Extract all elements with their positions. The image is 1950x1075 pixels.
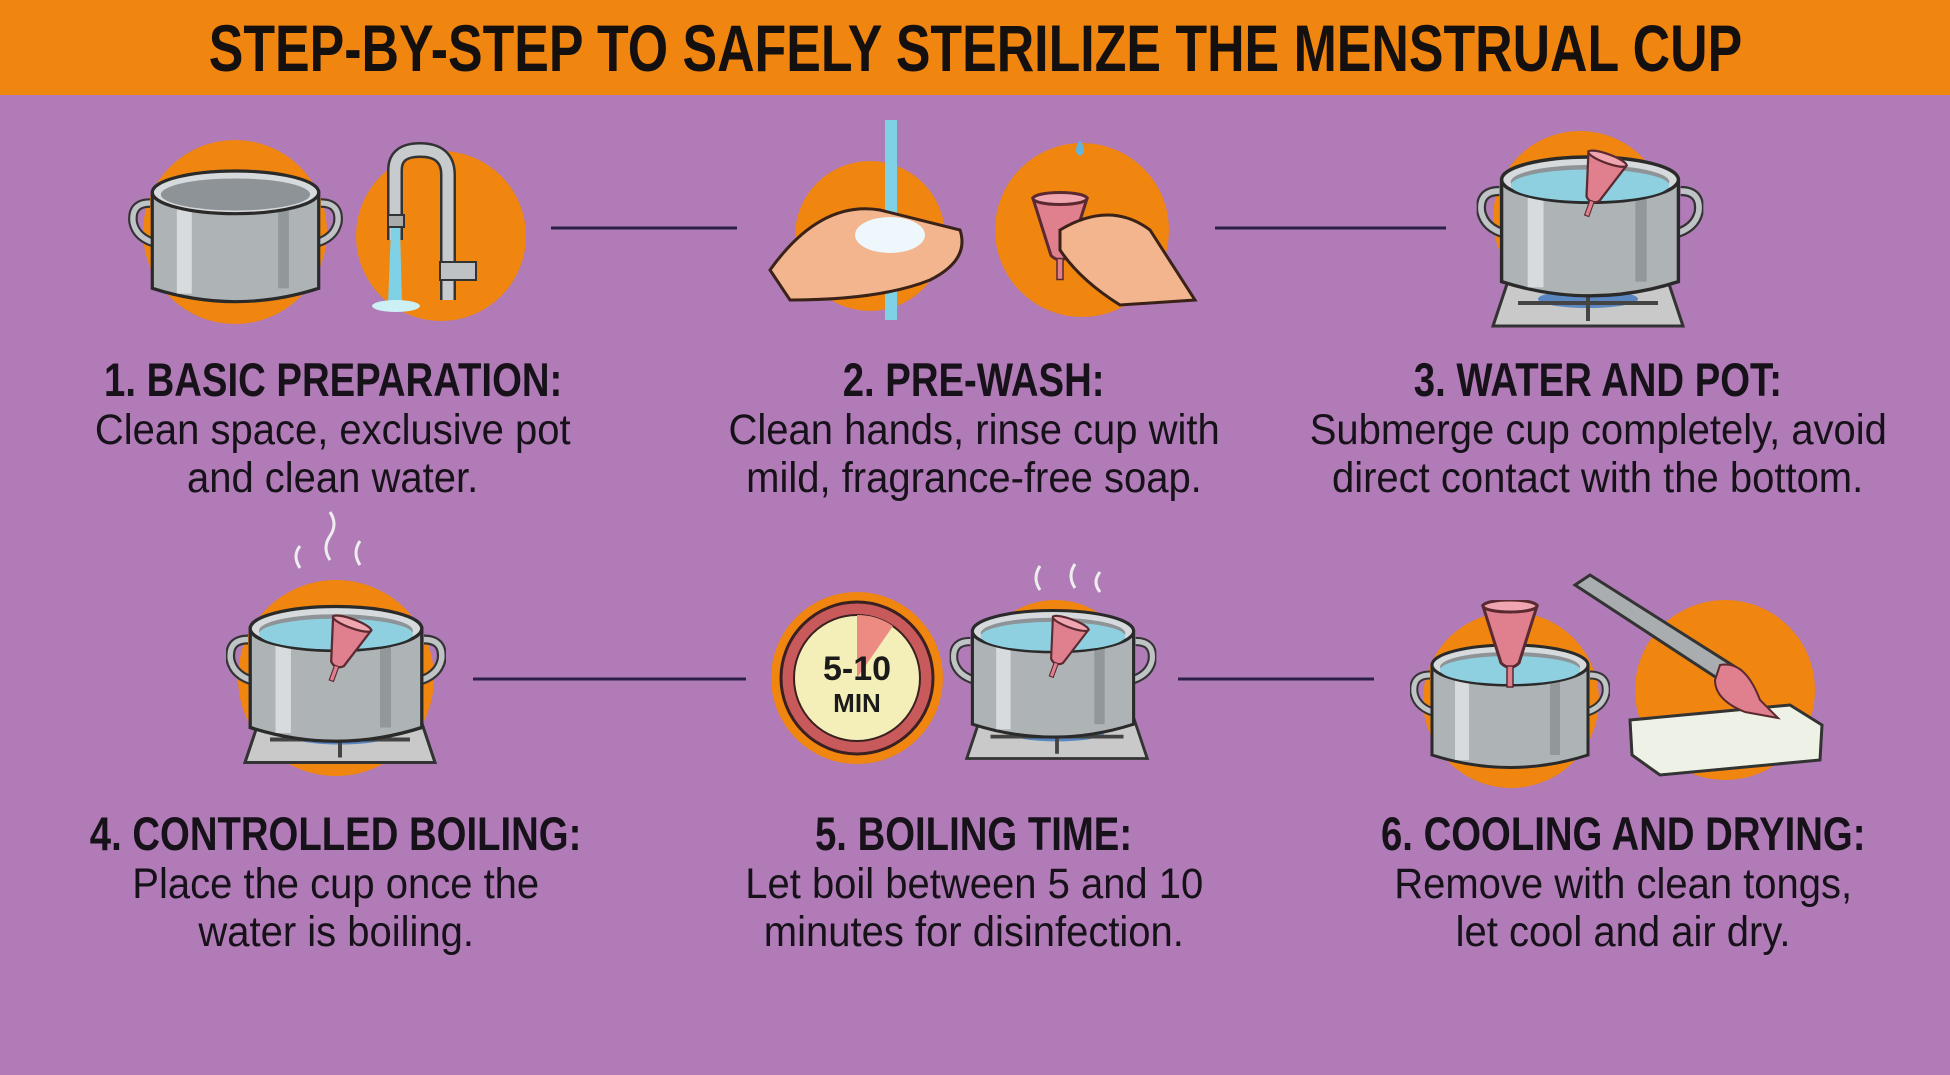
text: step 6 (1381, 807, 1865, 956)
text: step 4: water is boiling. (198, 908, 474, 956)
text: step 3: 3. WATER AND POT: (1414, 353, 1782, 406)
text: step 3: Submerge cup completely, avoid (1309, 406, 1887, 454)
text: step 1: 1. BASIC PREPARATION: (104, 353, 562, 406)
text: step 5: minutes for disinfection. (764, 908, 1184, 956)
icon: boiling pot (step 4) (230, 512, 442, 776)
icon: timer 5-10 min (step 5): 5-10 (823, 650, 891, 688)
text: step 3 (1309, 353, 1887, 502)
text: step 1 (95, 353, 571, 502)
text: step 1: and clean water. (187, 454, 479, 502)
text: step 4 (90, 807, 582, 956)
header bar (0, 0, 1950, 95)
text: step 4: 4. CONTROLLED BOILING: (90, 807, 582, 860)
text: step 5: Let boil between 5 and 10 (745, 860, 1203, 908)
connector lines (473, 228, 1446, 679)
text: step 6: let cool and air dry. (1456, 908, 1790, 956)
icon: pot on stove with cup (step 3) (1481, 131, 1699, 326)
text: step 6: 6. COOLING AND DRYING: (1381, 807, 1865, 860)
icon: boiling pot on stove (step 5) (954, 564, 1152, 760)
icon: pot and faucet (step 1) (133, 140, 526, 324)
icon: cooling pot and tongs on towel (step 6) (1414, 575, 1822, 788)
text: step 5 (745, 807, 1203, 956)
title: STEP-BY-STEP TO SAFELY STERILIZE THE MENSTRUAL CUP (209, 11, 1742, 85)
text: step 2 (728, 353, 1220, 502)
text: step 2: Clean hands, rinse cup with (728, 406, 1220, 454)
text: step 2: 2. PRE-WASH: (843, 353, 1105, 406)
text: step 6: Remove with clean tongs, (1394, 860, 1852, 908)
icon: timer 5-10 min (step 5): MIN (833, 688, 881, 718)
text: step 4: Place the cup once the (133, 860, 539, 908)
text: step 5: 5. BOILING TIME: (815, 807, 1133, 860)
text: step 3: direct contact with the bottom. (1332, 454, 1864, 502)
text: step 1: Clean space, exclusive pot (95, 406, 571, 454)
icon: timer 5-10 min (step 5) (771, 592, 943, 764)
icon: hands washing and cup rinse (step 2) (770, 120, 1195, 320)
text: step 2: mild, fragrance-free soap. (746, 454, 1202, 502)
